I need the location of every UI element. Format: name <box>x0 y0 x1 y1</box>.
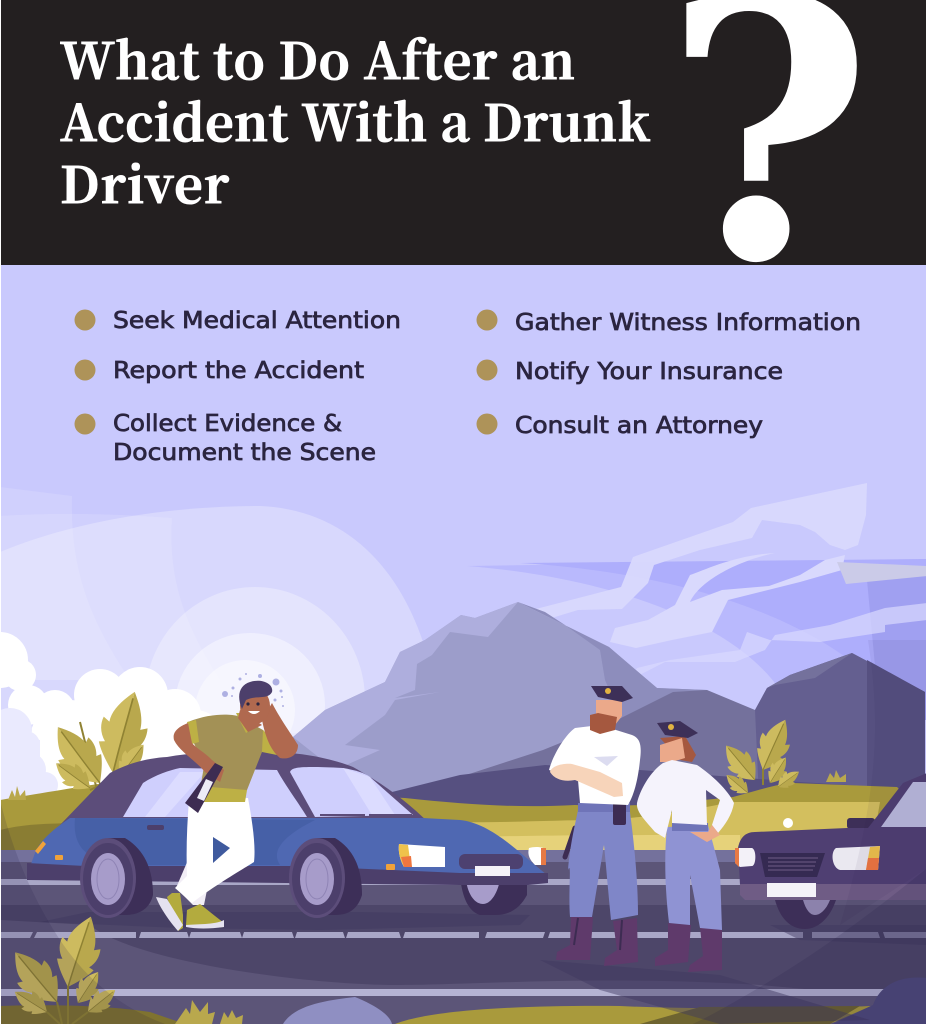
hills <box>1 783 898 850</box>
trousers <box>176 862 207 905</box>
front tyre <box>461 885 527 915</box>
cap <box>657 721 698 738</box>
shoes <box>167 893 183 931</box>
headlights <box>399 844 445 867</box>
right vignette overlay <box>840 640 927 925</box>
title: Driver <box>60 146 229 218</box>
grass tufts <box>8 770 846 1024</box>
shirt <box>188 714 265 790</box>
bottle <box>185 763 223 813</box>
title: Accident With a Drunk <box>60 84 650 156</box>
tyres <box>775 900 836 929</box>
hands <box>690 825 720 842</box>
wheels <box>105 838 153 915</box>
checklist left column <box>74 308 401 466</box>
checklist left column: Document the Scene <box>113 440 376 466</box>
male police officer <box>549 686 641 966</box>
checklist right column: Consult an Attorney <box>515 413 763 439</box>
car windows <box>123 768 307 817</box>
checklist right column <box>476 310 861 439</box>
checklist left column: Collect Evidence & <box>113 411 342 437</box>
checklist right column: Notify Your Insurance <box>515 359 783 385</box>
plate <box>767 883 816 897</box>
grille <box>760 853 825 877</box>
face <box>660 738 685 762</box>
female police officer <box>637 721 734 972</box>
checklist left column: Report the Accident <box>113 358 364 384</box>
boots <box>556 916 593 960</box>
dark sky bands <box>467 559 927 720</box>
title: What to Do After an <box>60 22 575 94</box>
crossed arms <box>550 764 623 797</box>
car lower trim <box>27 863 548 885</box>
blue car <box>27 752 548 918</box>
plant behind officers <box>726 720 799 794</box>
body <box>738 828 927 885</box>
purple car <box>735 773 927 929</box>
roof <box>868 773 927 830</box>
shirt <box>549 725 641 805</box>
ornament <box>783 818 793 828</box>
title <box>60 22 650 218</box>
grille, plate and small lights <box>459 854 523 869</box>
boots <box>655 923 691 966</box>
white clouds <box>1 632 212 791</box>
checklist right column: Gather Witness Information <box>515 310 861 336</box>
lavender foreground cloud <box>0 708 58 800</box>
baton <box>565 828 575 857</box>
road <box>0 850 927 1024</box>
drunk man leaning on the car <box>156 673 298 931</box>
foreground plant <box>1 910 121 1024</box>
plant behind blue car <box>56 692 148 791</box>
car body <box>27 818 547 875</box>
bottom grass and rocks <box>0 977 927 1024</box>
middle mountains <box>392 653 925 806</box>
sky and scene <box>0 265 927 1024</box>
header band <box>1 0 926 265</box>
arms <box>174 723 224 782</box>
trousers <box>665 825 722 930</box>
trousers <box>568 810 638 920</box>
cap <box>591 686 633 702</box>
wispy clouds <box>532 483 927 680</box>
back mountain <box>293 602 708 792</box>
head and hair <box>240 696 270 724</box>
road shadows <box>582 932 926 1024</box>
lower vignette overlay <box>0 800 927 1024</box>
face and beard <box>596 700 622 725</box>
wipers <box>847 818 875 829</box>
car roof <box>60 752 428 825</box>
checklist left column: Seek Medical Attention <box>113 308 401 334</box>
bumper <box>740 884 927 900</box>
radio <box>613 803 626 825</box>
light rings behind the man <box>1 506 422 737</box>
dizzy bubbles <box>222 673 284 707</box>
headlights <box>735 848 755 867</box>
shirt <box>637 760 734 838</box>
hair <box>660 736 696 762</box>
